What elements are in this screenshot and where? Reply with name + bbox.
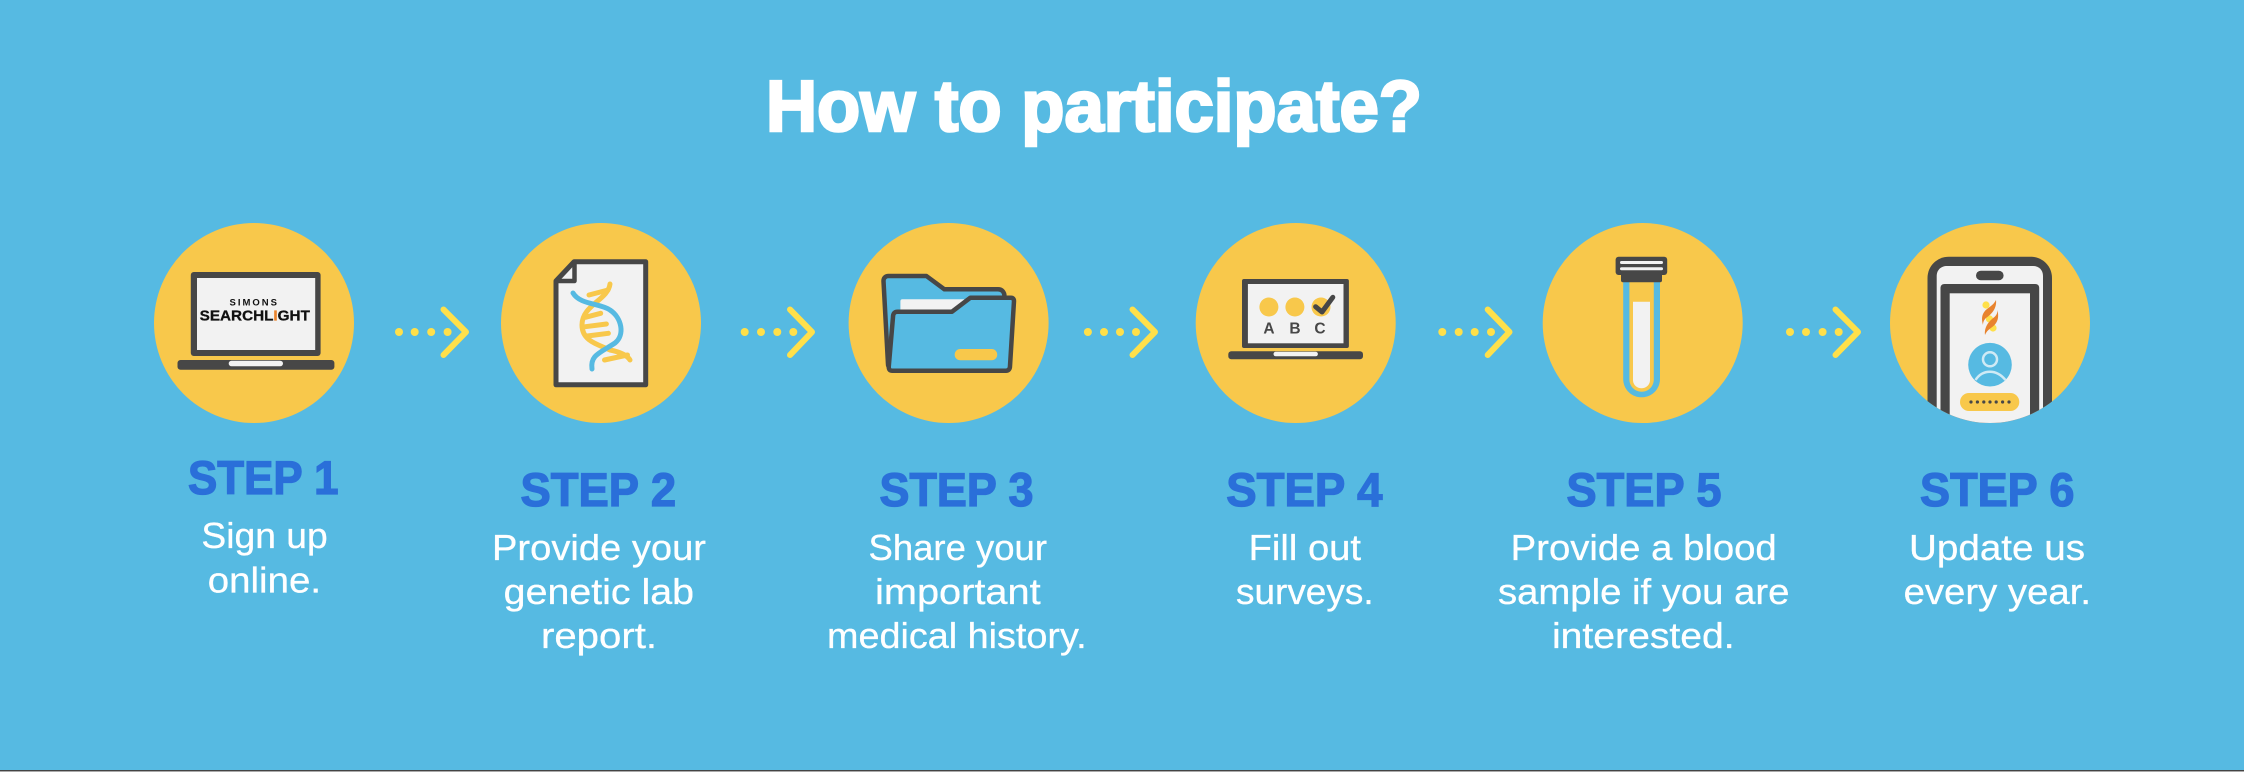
text: step 3 description: important [875,571,1041,612]
text: step 1 description: online. [208,560,321,601]
arrow: step 5 to 6 [1786,310,1858,355]
text: step 6 description: Update us [1909,527,2085,568]
heading: step 1: STEP 1 [188,451,338,504]
text: step 2 description: report. [541,615,657,656]
icon: laptop with survey: B [1289,320,1301,337]
arrow: step 1 to 2 [395,310,466,355]
icon: genetic report document [501,223,701,423]
icon: laptop with Simons Searchlight logo [154,223,354,423]
icon: laptop with Simons Searchlight logo: SIMONS [230,298,277,308]
icon: phone with login [1890,223,2090,433]
text: step 5 description [1498,527,1789,656]
panel: step 4 [1196,223,1396,612]
heading: step 4: STEP 4 [1226,463,1382,516]
panel: step 3 [827,223,1087,656]
panel: step 6 [1890,223,2091,612]
text: step 2 description [492,527,706,656]
panel: step 5 [1498,223,1789,656]
heading: step 3: STEP 3 [880,463,1034,516]
icon: laptop with survey: A [1263,320,1275,337]
icon: laptop with survey [1196,223,1396,423]
text: step 4 description: Fill out [1249,527,1361,568]
text: step 4 description [1236,527,1374,612]
text: step 3 description: medical history. [827,615,1087,656]
panel: step 1 [154,223,354,601]
text: step 5 description: Provide a blood [1511,527,1777,568]
icon: laptop with Simons Searchlight logo: SEARCHL IGHT [200,309,310,325]
text: step 5 description: interested. [1552,615,1735,656]
text: step 3 description: Share your [868,527,1047,568]
icon: blood sample tube [1543,223,1743,423]
icon: medical folder [849,223,1049,423]
arrow: step 4 to 5 [1438,310,1510,355]
text: step 2 description: genetic lab [504,571,694,612]
arrow: step 3 to 4 [1084,310,1155,355]
text: step 1 description: Sign up [201,515,328,556]
text: step 4 description: surveys. [1236,571,1374,612]
heading: step 2: STEP 2 [520,463,676,516]
text: step 2 description: Provide your [492,527,706,568]
text: step 6 description [1904,527,2091,612]
icon: laptop with survey: C [1314,320,1326,337]
heading: step 5: STEP 5 [1566,463,1722,516]
arrow: step 2 to 3 [741,310,812,355]
text: step 1 description [201,515,328,601]
text: step 6 description: every year. [1904,571,2091,612]
heading: step 6: STEP 6 [1920,463,2074,516]
text: step 3 description [827,527,1087,656]
panel: step 2 [492,223,706,656]
title: How to participate? [766,67,1422,147]
text: step 5 description: sample if you are [1498,571,1789,612]
